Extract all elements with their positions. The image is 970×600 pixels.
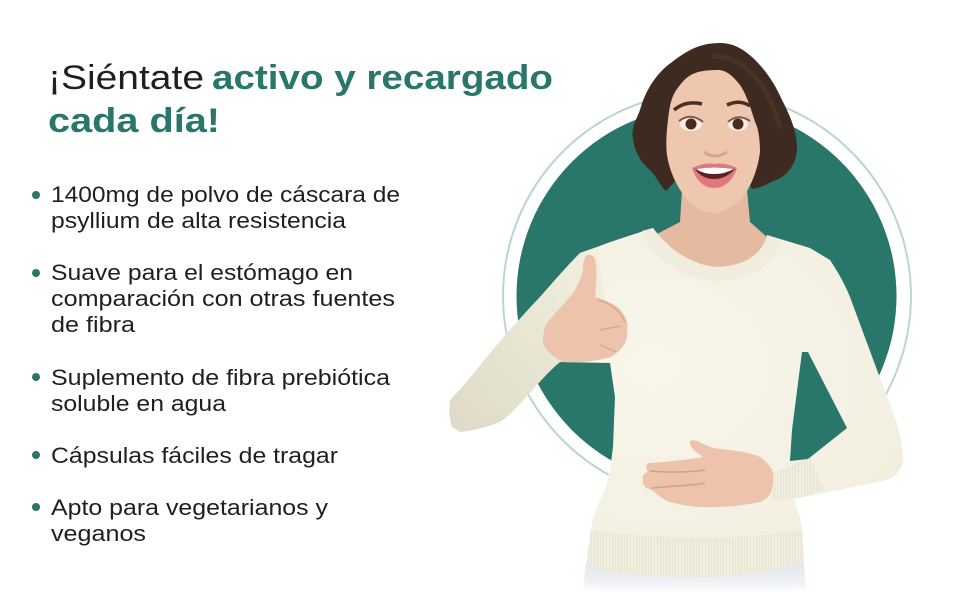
bullet: gentle on stomach: Suave para el estómago en xyxy=(51,260,353,285)
green circle xyxy=(516,106,896,486)
bullet: high strength powder xyxy=(32,182,400,233)
gap between body and arm xyxy=(790,352,847,461)
bullet: easy capsules: Cápsulas fáciles de tragar xyxy=(51,443,339,468)
bullet: prebiotic fibre: Suplemento de fibra prebiótica xyxy=(51,365,391,390)
bullet: vegan: veganos xyxy=(51,521,146,546)
bullet: gentle on stomach: de fibra xyxy=(51,312,136,337)
bullet: vegan xyxy=(32,495,329,546)
right cuff xyxy=(770,458,825,502)
title: cada día! xyxy=(48,102,220,140)
bullet: prebiotic fibre xyxy=(32,365,391,416)
thumbs-up hand xyxy=(543,255,627,362)
eyes and brows xyxy=(674,102,750,156)
bullet: high strength powder: psyllium de alta resistencia xyxy=(51,208,347,233)
title xyxy=(48,59,553,140)
bullet list xyxy=(32,182,400,546)
woman photo illustration xyxy=(449,43,903,594)
hair xyxy=(632,43,797,191)
sweater xyxy=(449,228,903,577)
smile xyxy=(692,164,737,188)
hair highlights xyxy=(712,56,780,128)
bullet: gentle on stomach xyxy=(32,260,395,337)
left sleeve xyxy=(449,247,605,432)
title: activo y recargado xyxy=(212,59,553,97)
neck xyxy=(655,190,768,272)
bullet: gentle on stomach: comparación con otras fuentes xyxy=(51,286,395,311)
finger lines xyxy=(650,470,705,488)
thumb knuckle shading xyxy=(598,300,625,352)
sweater hem xyxy=(587,530,804,577)
sweater collar xyxy=(642,228,780,281)
title: ¡Siéntate xyxy=(48,59,204,97)
background ring xyxy=(503,92,911,500)
jeans xyxy=(583,562,806,594)
bullet: vegan: Apto para vegetarianos y xyxy=(51,495,329,520)
face xyxy=(666,70,760,213)
bullet: high strength powder: 1400mg de polvo de cáscara de xyxy=(51,182,400,207)
bullet: prebiotic fibre: soluble en agua xyxy=(51,391,227,416)
hand on stomach xyxy=(643,440,773,507)
